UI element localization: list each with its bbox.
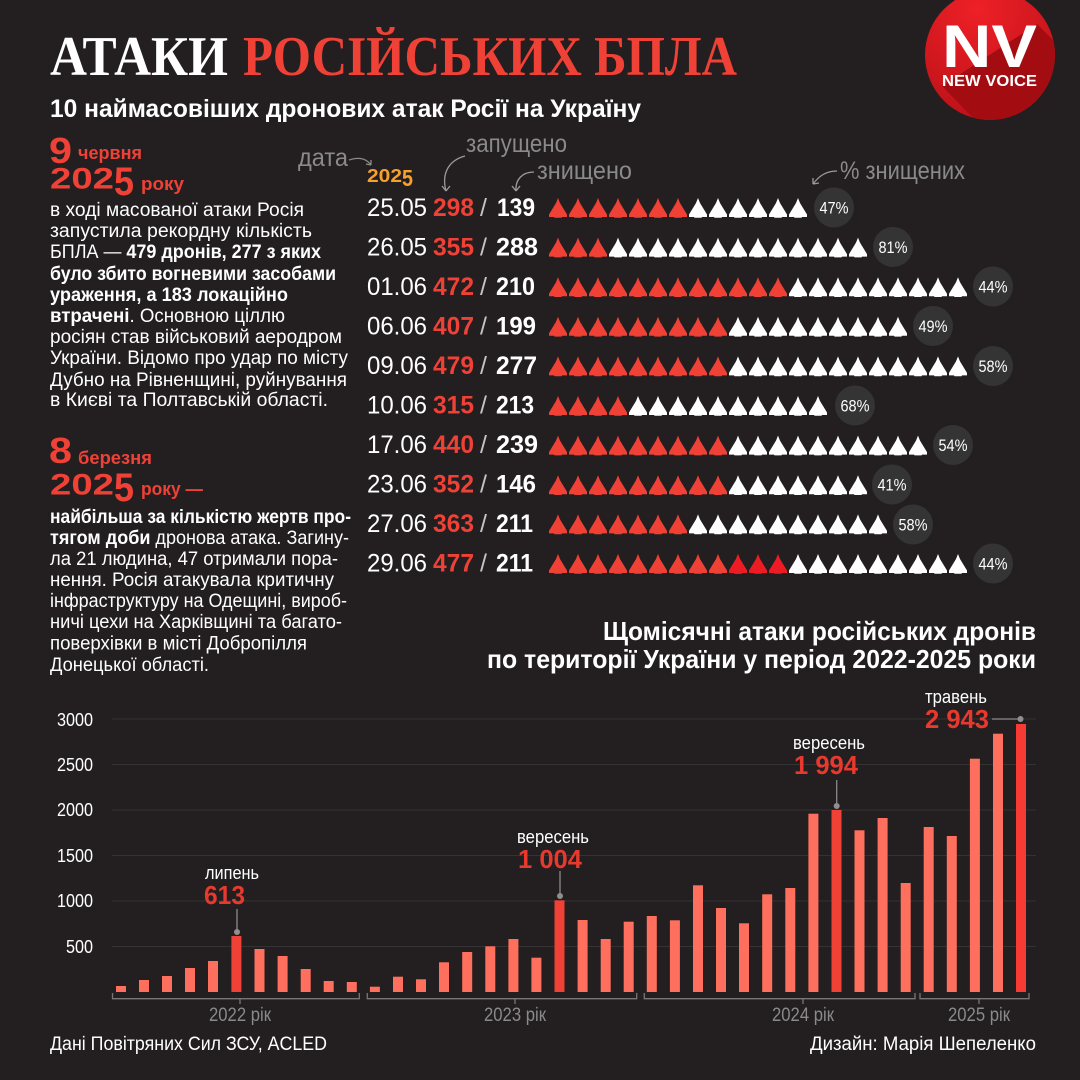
row 09.06: 479 <box>433 352 474 380</box>
y axis labels: 2500 <box>57 755 93 775</box>
bars <box>116 724 1026 992</box>
bar chart: monthly drone attacks 2022-2025 <box>57 687 1036 1026</box>
date heading: 9 червня 2025 року: червня <box>78 143 142 163</box>
row 17.06: 54% <box>938 436 968 455</box>
y axis labels: 500 <box>66 937 93 957</box>
date heading: 8 березня 2025 року: 202 <box>50 468 114 502</box>
row 09.06: 09.06 <box>367 352 427 380</box>
date heading: 8 березня 2025 року: 8 <box>49 430 72 471</box>
row 10.06: / <box>480 392 487 420</box>
row 06.06: 199 <box>496 312 536 340</box>
row 10.06 <box>367 386 875 426</box>
callout: вересень 1 994 <box>793 733 865 809</box>
date heading: 8 березня 2025 року <box>49 430 203 510</box>
table legend: column annotations with arrows <box>298 130 965 191</box>
row 17.06: / <box>480 431 487 459</box>
y axis labels: 3000 <box>57 710 93 730</box>
table legend: column annotations with arrows: 202 <box>367 166 402 186</box>
row 26.05: / <box>480 234 487 262</box>
row 23.06: / <box>480 470 487 498</box>
row 06.06: 49% <box>918 317 948 336</box>
title <box>50 26 737 88</box>
row 27.06: 211 <box>496 510 533 538</box>
callout: вересень 1 994: вересень <box>793 733 865 753</box>
year labels: 2022 рік <box>209 1005 272 1026</box>
y axis labels: 1000 <box>57 891 93 911</box>
date heading: 9 червня 2025 року: 5 <box>114 160 134 204</box>
row 06.06: 06.06 <box>367 312 427 340</box>
row 25.05: 47% <box>820 198 848 218</box>
row 27.06: 58% <box>898 516 928 534</box>
row 17.06: 239 <box>496 431 538 459</box>
y axis labels: 1500 <box>57 846 93 866</box>
text block: deadliest attack description: нення. Росія атакувала критичну <box>50 570 334 591</box>
year labels: 2024 рік <box>772 1005 835 1026</box>
title: РОСІЙСЬКИХ БПЛА <box>243 26 737 88</box>
date heading: 8 березня 2025 року: року — <box>141 479 203 499</box>
year labels <box>209 1005 1011 1026</box>
row 29.06: 29.06 <box>367 550 427 578</box>
text block: record attack description <box>50 200 348 411</box>
row 06.06 <box>367 306 953 346</box>
source note: Дані Повітряних Сил ЗСУ, ACLED <box>50 1034 327 1055</box>
text block: record attack description: в ході масованої атаки Росія <box>50 200 304 221</box>
text block: deadliest attack description: ничі цехи на Харківщині та багато- <box>50 612 342 633</box>
text block: deadliest attack description: ла 21 людина, 47 отримали пора- <box>50 549 338 570</box>
panel: 8 March 2025 deadliest attack <box>49 430 351 676</box>
chart title: по території України у період 2022-2025 роки <box>487 644 1036 674</box>
table legend: column annotations with arrows: знищено <box>537 157 632 185</box>
row 25.05: 25.05 <box>367 194 427 222</box>
row 26.05: 288 <box>496 234 538 262</box>
date heading: 9 червня 2025 року: року <box>141 174 184 194</box>
row 09.06: 58% <box>978 357 1008 376</box>
date heading: 9 червня 2025 року: 202 <box>50 162 114 196</box>
callout: вересень 1 004 <box>517 827 589 899</box>
row 01.06 <box>367 266 1013 306</box>
row 26.05: 81% <box>878 238 908 257</box>
row 09.06: / <box>480 352 487 380</box>
row 01.06: 210 <box>496 273 535 301</box>
subtitle: 10 наймасовіших дронових атак Росії на Україну <box>50 95 641 123</box>
text block: record attack description: Дубно на Рівненщині, руйнування <box>50 370 347 391</box>
row 06.06: 407 <box>433 312 474 340</box>
row 06.06: / <box>480 312 487 340</box>
row 26.05: 355 <box>433 234 474 262</box>
row 27.06: / <box>480 510 487 538</box>
date heading: 9 червня 2025 року: 9 <box>49 130 72 171</box>
row 10.06: 10.06 <box>367 392 427 420</box>
row 10.06: 315 <box>433 392 474 420</box>
text block: record attack description: росіян став військовий аеродром <box>50 327 342 348</box>
text block: record attack description: в Києві та Полтавській області. <box>50 390 328 411</box>
row 29.06: 211 <box>496 550 533 578</box>
row 29.06: 44% <box>978 554 1008 574</box>
callout: липень 613 <box>204 863 259 935</box>
text block: record attack description: України. Відомо про удар по місту <box>50 348 348 369</box>
table legend: column annotations with arrows: дата <box>298 144 348 172</box>
row 27.06: 363 <box>433 510 474 538</box>
text block: deadliest attack description: тягом доби дронова атака. Загину- <box>50 528 349 549</box>
row 25.05 <box>367 188 854 228</box>
date heading: 8 березня 2025 року: 5 <box>114 466 134 510</box>
row 01.06: 44% <box>978 278 1008 296</box>
callout: вересень 1 004: вересень <box>517 827 589 847</box>
text block: deadliest attack description: Донецької області. <box>50 655 209 676</box>
callout: травень 2 943 <box>925 687 1024 734</box>
design credit: Дизайн: Марія Шепеленко <box>810 1034 1036 1055</box>
table legend: column annotations with arrows: 5 <box>402 165 413 191</box>
row 01.06: / <box>480 273 487 301</box>
row 23.06: 23.06 <box>367 470 427 498</box>
logo: NV New Voice: NEW VOICE <box>942 73 1037 90</box>
callout: липень 613: липень <box>205 863 259 883</box>
text block: record attack description: було збито вогневими засобами <box>50 264 336 285</box>
row 26.05: 26.05 <box>367 234 427 262</box>
row 29.06: 477 <box>433 550 474 578</box>
row 27.06 <box>367 504 933 544</box>
row 10.06: 68% <box>840 396 870 416</box>
year brackets <box>112 993 1029 1004</box>
panel: 9 June 2025 record attack <box>49 130 348 411</box>
y axis labels: 2000 <box>57 800 93 820</box>
year labels: 2025 рік <box>948 1005 1011 1026</box>
row 10.06: 213 <box>496 392 534 420</box>
row 29.06: / <box>480 550 487 578</box>
text block: record attack description: втрачені. Основною ціллю <box>50 306 285 327</box>
date heading: 8 березня 2025 року: березня <box>78 448 152 468</box>
row 17.06: 17.06 <box>367 431 427 459</box>
row 01.06: 01.06 <box>367 273 427 301</box>
row 29.06 <box>367 544 1013 584</box>
row 23.06: 352 <box>433 470 474 498</box>
row 01.06: 472 <box>433 273 474 301</box>
text block: deadliest attack description: інфраструктуру на Одещині, вироб- <box>50 591 347 612</box>
y axis labels <box>57 710 93 957</box>
chart title: Щомісячні атаки російських дронів <box>603 616 1036 646</box>
chart title <box>487 616 1036 674</box>
row 09.06 <box>367 346 1013 386</box>
title: АТАКИ <box>50 26 228 88</box>
callout: травень 2 943: травень <box>925 687 987 707</box>
date heading: 9 червня 2025 року <box>49 130 184 204</box>
text block: deadliest attack description: поверхівки в місті Добропілля <box>50 634 307 654</box>
callout: липень 613: 613 <box>204 880 245 910</box>
text block: deadliest attack description <box>50 507 351 676</box>
row 23.06 <box>367 464 912 504</box>
row 17.06 <box>367 425 973 465</box>
logo: NV New Voice <box>925 0 1055 120</box>
row 23.06: 146 <box>496 470 536 498</box>
row 25.05: 298 <box>433 194 474 222</box>
row 26.05 <box>367 227 913 267</box>
year labels: 2023 рік <box>484 1005 547 1026</box>
row 27.06: 27.06 <box>367 510 427 538</box>
table legend: column annotations with arrows: % знищених <box>840 157 965 185</box>
callout: вересень 1 004: 1 004 <box>518 844 583 874</box>
data table: 10 largest drone attacks <box>367 188 1013 584</box>
table legend: column annotations with arrows: запущено <box>466 130 567 158</box>
row 25.05: / <box>480 194 487 222</box>
text block: record attack description: запустила рекордну кількість <box>50 221 312 242</box>
text block: record attack description: БПЛА — 479 дронів, 277 з яких <box>50 242 321 263</box>
row 23.06: 41% <box>878 476 906 494</box>
row 17.06: 440 <box>433 431 474 459</box>
row 25.05: 139 <box>497 194 535 222</box>
row 09.06: 277 <box>496 352 537 380</box>
text block: record attack description: ураження, а 183 локаційно <box>50 285 288 306</box>
logo: NV New Voice: NV <box>942 13 1037 80</box>
callout: травень 2 943: 2 943 <box>925 704 989 734</box>
callout: вересень 1 994: 1 994 <box>794 750 859 780</box>
text block: deadliest attack description: найбільша за кількістю жертв про- <box>50 507 351 528</box>
